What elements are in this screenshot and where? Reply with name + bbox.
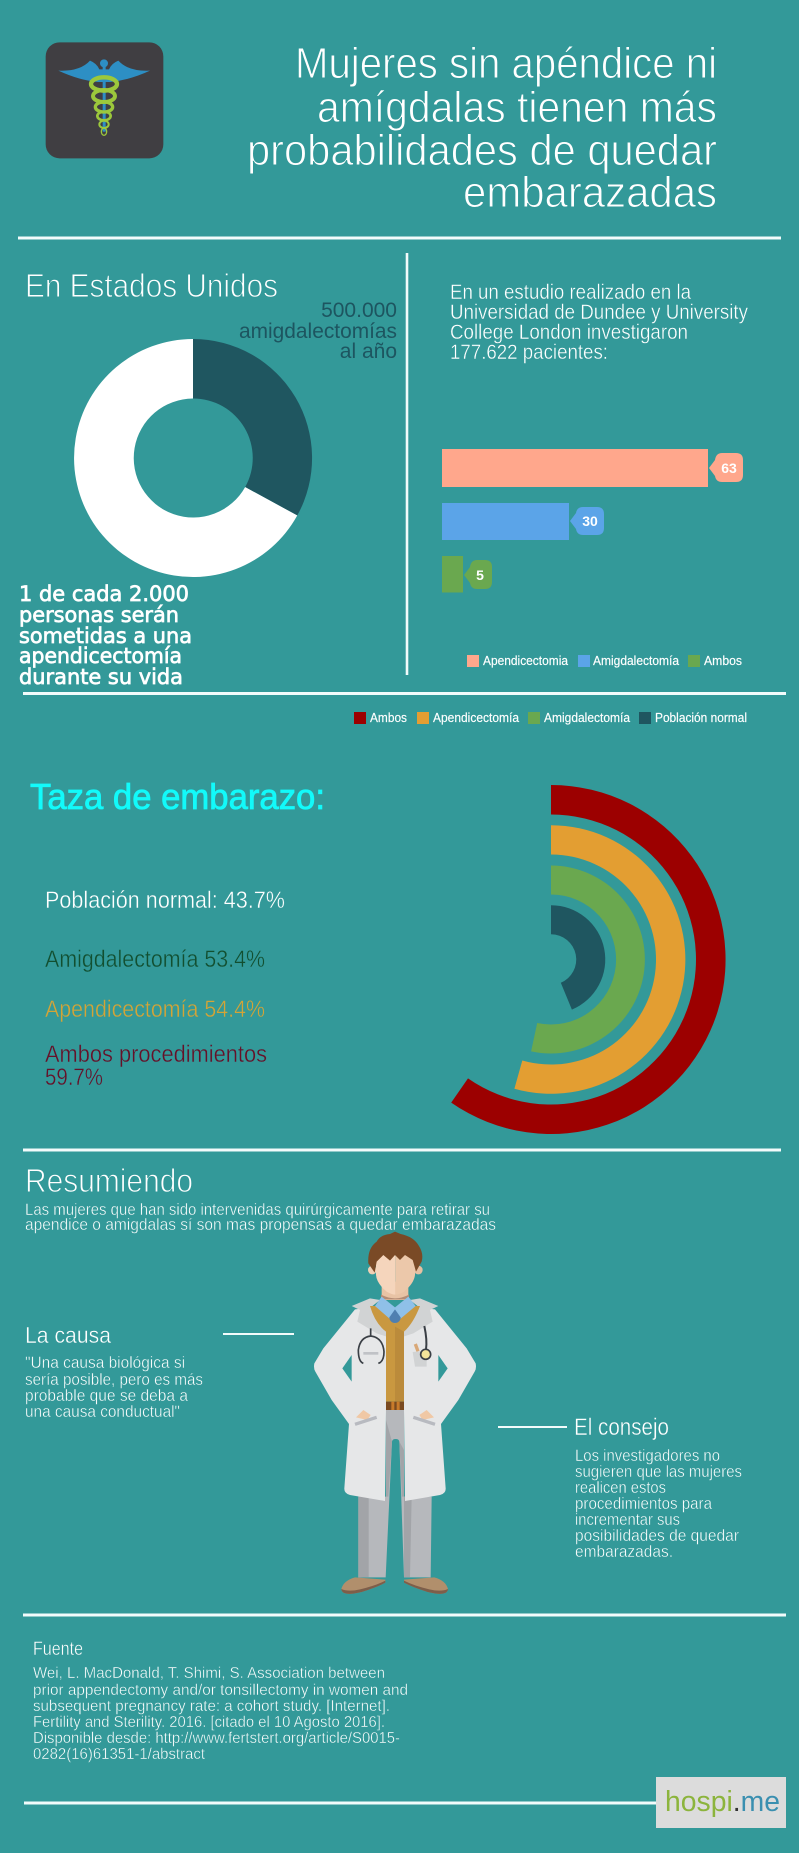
text: El consejo: El consejo (574, 1414, 669, 1441)
text: El consejo: procedimientos para (575, 1494, 712, 1513)
text: pregnancy rates: Amigdalectomía 53.4% (45, 946, 265, 973)
connector: La causa (223, 1333, 294, 1335)
donut segment: white (74, 339, 297, 577)
legend: bar chart: Apendicectomia (483, 654, 568, 668)
donut segment: dark (193, 339, 312, 515)
callout: 1 de cada 2.000: sometidas a una (19, 624, 192, 648)
text: study intro: 177.622 pacientes: (450, 340, 608, 364)
text: El consejo: posibilidades de quedar (575, 1526, 739, 1545)
text: La causa (25, 1322, 203, 1421)
legend: bar chart: Amigdalectomía (593, 654, 679, 668)
ring: Amigdalectomia 53.4 (531, 866, 645, 1053)
callout: 1 de cada 2.000: personas serán (19, 603, 179, 627)
title: Mujeres sin apéndice ni (295, 39, 717, 88)
legend: bar chart (467, 654, 742, 668)
shoes (341, 1577, 448, 1594)
text: El consejo (574, 1414, 742, 1561)
text: pregnancy rates: Ambos procedimientos (45, 1041, 267, 1068)
callout: 500.000 amigdalectomias: 500.000 (321, 299, 397, 322)
icon: caduceus logo (46, 42, 163, 158)
text: source: subsequent pregnancy rate: a cohort study. [Internet]. (33, 1698, 390, 1715)
bar: Amigdalectomia 30: 30 (582, 513, 598, 529)
text: pregnancy rates (45, 887, 285, 1091)
donut chart (74, 339, 312, 577)
heading: Taza de embarazo: Taza de embarazo: (30, 776, 325, 817)
heading: Resumiendo: Resumiendo (25, 1162, 193, 1199)
logo: hospi.me (656, 1777, 786, 1828)
text: El consejo: realicen estos (575, 1478, 666, 1497)
legend: radial chart: Ambos (370, 711, 407, 725)
callout: 500.000 amigdalectomias (239, 299, 397, 363)
ring: Apendicectomia 54.4 (514, 825, 685, 1094)
text: La causa: sería posible, pero es más (25, 1370, 203, 1389)
text: study intro (450, 280, 748, 364)
text: La causa: probable que se deba a (25, 1386, 188, 1405)
callout: 1 de cada 2.000: 1 de cada 2.000 (19, 582, 189, 606)
legend: bar chart: Ambos (704, 654, 742, 668)
bar: Ambos 5: 5 (476, 567, 484, 583)
text: source: Disponible desde: http://www.fertstert.org/article/S0015- (33, 1730, 400, 1747)
lab coat (314, 1298, 476, 1501)
text: El consejo: embarazadas. (575, 1542, 673, 1561)
text: source: prior appendectomy and/or tonsillectomy in women and (33, 1682, 408, 1699)
text: El consejo: Los investigadores no (575, 1446, 720, 1465)
text: La causa: una causa conductual" (25, 1402, 180, 1421)
ring: Poblacion normal 43.7 (551, 905, 605, 1010)
neck and head (368, 1232, 423, 1300)
text: study intro: Universidad de Dundee y University (450, 300, 748, 324)
callout: 1 de cada 2.000 (19, 582, 192, 689)
bar: Apendicectomia 63: 63 (721, 460, 737, 476)
text: study intro: En un estudio realizado en la (450, 280, 691, 304)
title (247, 39, 717, 217)
stethoscope (358, 1326, 431, 1367)
text: source: Fertility and Sterility. 2016. [citado el 10 Agosto 2016]. (33, 1714, 385, 1731)
text: source (33, 1639, 408, 1763)
text: source: Fuente (33, 1639, 83, 1660)
title: amígdalas tienen más (317, 83, 717, 132)
legend: radial chart: Amigdalectomía (544, 711, 630, 725)
radial bar chart (451, 785, 726, 1134)
legend: radial chart: Población normal (655, 711, 747, 725)
bar: Ambos 5 (442, 556, 492, 592)
text: pregnancy rates: Apendicectomía 54.4% (45, 996, 265, 1023)
text: source: Wei, L. MacDonald, T. Shimi, S. Association between (33, 1665, 385, 1682)
text: study intro: College London investigaron (450, 320, 688, 344)
scarf and shirt (370, 1297, 420, 1410)
text: La causa: La causa (25, 1322, 111, 1348)
callout: 1 de cada 2.000: durante su vida (19, 665, 183, 689)
title: embarazadas (463, 168, 717, 217)
callout: 500.000 amigdalectomias: amigdalectomías (239, 320, 397, 343)
bar: Apendicectomia 63 (442, 449, 743, 487)
legend: radial chart: Apendicectomía (433, 711, 519, 725)
text: El consejo: incrementar sus (575, 1510, 680, 1529)
logo: hospi.me: hospi.me (665, 1786, 780, 1818)
legend: radial chart (354, 711, 747, 725)
text: pregnancy rates: 59.7% (45, 1064, 103, 1091)
trousers (358, 1410, 432, 1577)
ring: Ambos 59.7 (451, 785, 726, 1134)
callout: 500.000 amigdalectomias: al año (340, 340, 397, 363)
heading: En Estados Unidos: En Estados Unidos (25, 267, 278, 304)
connector: El consejo (498, 1426, 567, 1428)
illustration: doctor (314, 1232, 476, 1594)
bar: Amigdalectomia 30 (442, 503, 604, 540)
text: La causa: "Una causa biológica si (25, 1353, 185, 1372)
callout: 1 de cada 2.000: apendicectomía (19, 644, 182, 668)
text: summary: apendice o amigdalas sí son mas propensas a quedar embarazadas (25, 1215, 496, 1234)
text: El consejo: sugieren que las mujeres (575, 1462, 742, 1481)
hands and pockets (355, 1410, 435, 1424)
text: pregnancy rates: Población normal: 43.7% (45, 887, 285, 914)
text: summary: Las mujeres que han sido intervenidas quirúrgicamente para retirar su (25, 1200, 490, 1219)
bar chart (442, 449, 743, 592)
text: source: 0282(16)61351-1/abstract (33, 1746, 206, 1763)
title: probabilidades de quedar (247, 126, 717, 175)
text: summary (25, 1200, 496, 1234)
